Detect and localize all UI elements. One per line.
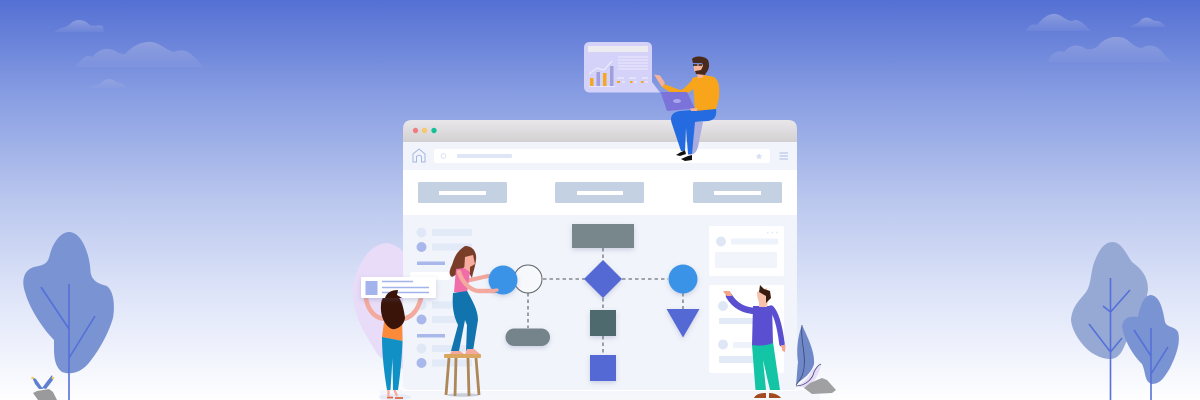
held circle [488, 266, 518, 294]
process box top [572, 224, 634, 248]
hair [759, 285, 771, 303]
shadow [379, 394, 411, 400]
person: woman holding card [361, 277, 436, 400]
outline circle [514, 265, 542, 293]
nav button 3 [693, 182, 782, 203]
lower hand [690, 108, 697, 111]
right card top [709, 226, 784, 276]
nav button 2 [555, 182, 644, 203]
face [464, 255, 475, 272]
hair over card [385, 290, 402, 298]
jeans [451, 291, 478, 351]
browser window [403, 120, 797, 391]
person: man pointing [723, 285, 786, 398]
plant and rock right [796, 325, 836, 394]
torso [752, 306, 773, 346]
address bar [403, 142, 797, 170]
icon: menu [780, 153, 788, 159]
top [382, 322, 402, 341]
nav button 1 [418, 182, 507, 203]
icon: home [413, 149, 425, 162]
triangle [666, 309, 700, 338]
legs lower skin [388, 390, 397, 396]
shoes [676, 150, 686, 156]
raised arm [729, 296, 757, 311]
chart header [588, 46, 648, 52]
hand [654, 74, 665, 87]
hair and beard [692, 56, 709, 75]
tree left [23, 232, 114, 400]
mini legend [617, 78, 648, 82]
hair [450, 246, 476, 278]
face [694, 64, 704, 78]
chart bubble [584, 42, 660, 92]
front arm [459, 272, 495, 291]
torso [692, 75, 719, 111]
person: woman on stool [450, 246, 518, 354]
legs [671, 108, 716, 154]
connectors [528, 248, 683, 355]
hands [723, 291, 732, 296]
title bar [403, 120, 797, 142]
stool [444, 354, 481, 397]
icon: search [441, 154, 446, 158]
window controls [413, 128, 437, 133]
leg shadow [688, 122, 703, 155]
decision diamond [584, 260, 622, 298]
small plant and rock left [31, 375, 57, 400]
shoes [754, 393, 781, 398]
person: man with laptop [654, 56, 719, 161]
feet [450, 349, 480, 354]
far arm [771, 308, 782, 344]
jeans [382, 337, 402, 390]
bar chart [589, 61, 615, 86]
tree right small [1122, 295, 1179, 400]
purple blob behind woman [353, 243, 405, 370]
teal square [590, 310, 616, 336]
url input [434, 149, 770, 163]
blue square [590, 355, 616, 381]
shoes [387, 396, 403, 399]
right card bottom [709, 285, 784, 373]
hair [381, 290, 405, 329]
tree right large [1071, 242, 1148, 400]
terminator pill [506, 328, 550, 346]
flowchart [506, 224, 700, 381]
arms [366, 298, 421, 319]
nav row [403, 170, 797, 215]
head [757, 288, 768, 307]
clouds right [1025, 14, 1171, 62]
laptop [660, 92, 695, 111]
top [454, 268, 470, 293]
ui card held [361, 277, 436, 298]
legs [752, 342, 780, 390]
icon: star [756, 153, 762, 159]
back arm [466, 276, 488, 281]
clouds left [54, 20, 204, 88]
glasses [693, 64, 702, 66]
ground strip [380, 390, 820, 400]
left sidebar list [410, 228, 472, 368]
text lines [618, 57, 648, 69]
right circle [668, 264, 698, 294]
fingers [490, 290, 497, 291]
url text placeholder [457, 154, 512, 158]
pointing arm [662, 78, 696, 96]
content area [403, 215, 797, 390]
